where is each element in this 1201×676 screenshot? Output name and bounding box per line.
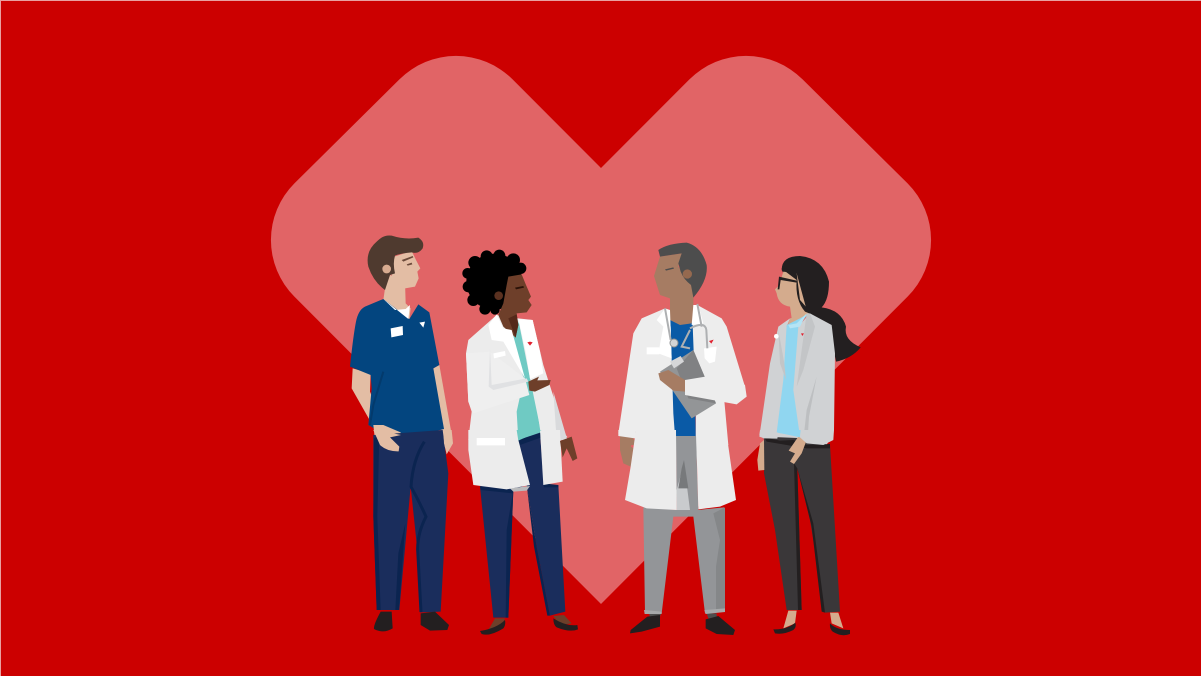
figure: woman doctor in white coat (462, 250, 578, 635)
afro hair (462, 250, 526, 315)
figure: male doctor with stethoscope and clipboard (618, 243, 747, 635)
figure: woman in grey blazer with glasses (757, 256, 861, 635)
figure: nurse in blue scrubs (350, 235, 453, 631)
right coat panel (693, 305, 745, 445)
left coat panel (618, 308, 676, 445)
heart (271, 56, 931, 604)
